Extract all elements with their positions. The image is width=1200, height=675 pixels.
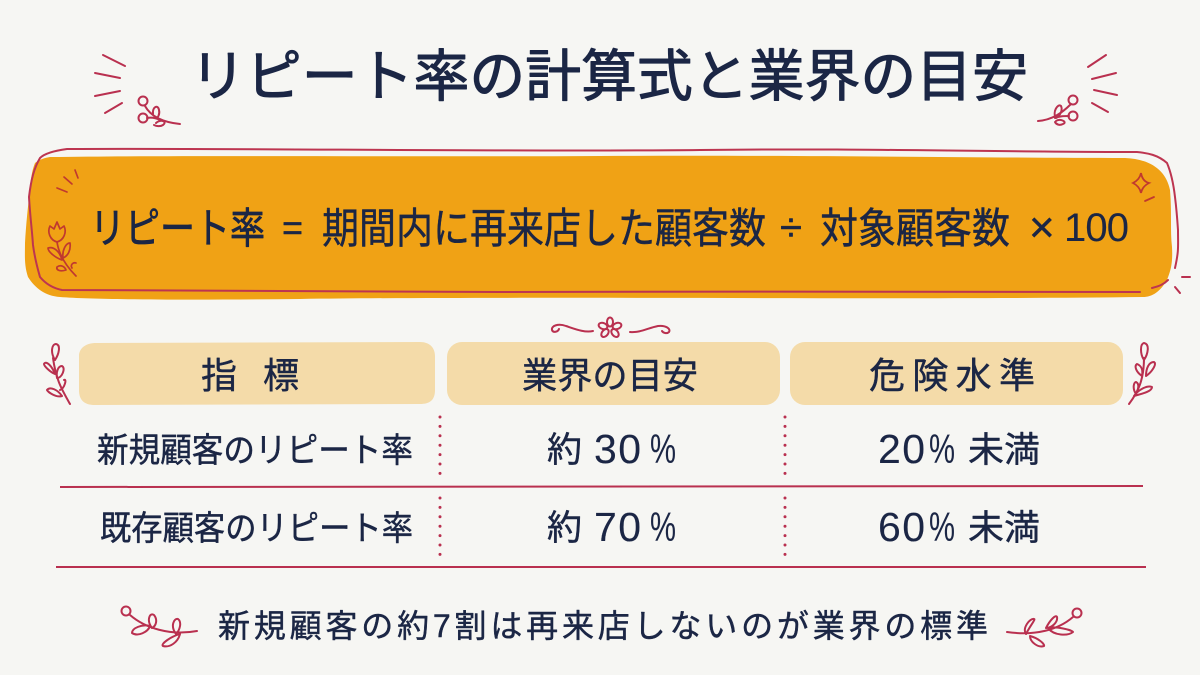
row: 既存顧客: 約 [547, 509, 582, 548]
icon: formula right sparkle [1133, 173, 1154, 201]
header cell: 危険水準 [790, 342, 1123, 405]
header cell: 業界の目安 [447, 342, 780, 405]
formula text: 対象顧客数 [820, 205, 1010, 252]
row: 既存顧客: % [650, 504, 676, 550]
icon: footer left sprig [122, 606, 197, 646]
row: 新規顧客: 未満 [968, 431, 1040, 470]
formula text: = [282, 207, 303, 248]
icon: table left sprig [44, 344, 70, 404]
header cell: 業界の目安: 業界の目安 [522, 355, 698, 396]
formula hand-drawn outline [29, 149, 1178, 292]
row: 新規顧客: % [929, 426, 955, 472]
formula text: 100 [1064, 206, 1129, 250]
row: 新規顧客: 30 [594, 426, 641, 472]
formula text: ÷ [780, 206, 802, 250]
row: 既存顧客: % [929, 504, 955, 550]
row: 新規顧客: 20 [878, 426, 925, 472]
row: 既存顧客: 未満 [968, 509, 1040, 548]
title: リピート率の計算式と業界の目安 [190, 45, 1028, 108]
row: 新規顧客: % [650, 426, 676, 472]
panel: formula [25, 149, 1190, 300]
row: 既存顧客: 70 [594, 504, 641, 550]
footer note: 新規顧客の約7割は再来店しないのが業界の標準 [218, 608, 988, 644]
row: 新規顧客: 新規顧客のリピート率 [97, 432, 413, 470]
row: 既存顧客 [100, 504, 1040, 550]
formula text [90, 203, 1129, 252]
icon: table right sprig [1129, 343, 1155, 404]
row: 既存顧客: 既存顧客のリピート率 [100, 510, 413, 548]
icon: title left sparkle lines and sprig [95, 55, 180, 126]
header cell: 指標 [79, 342, 435, 405]
panel: comparison table [56, 342, 1146, 568]
formula orange background [25, 156, 1172, 300]
row: 既存顧客: 60 [878, 504, 925, 550]
header cell: 危険水準: 危険水準 [869, 355, 1035, 396]
row: 新規顧客 [97, 426, 1040, 472]
header cell: 指標: 指標 [201, 355, 299, 396]
icon: footer right sprig [1007, 608, 1082, 646]
formula text: × [1029, 203, 1055, 252]
icon: formula corner ticks [1175, 277, 1190, 293]
formula text: リピート率 [90, 205, 265, 252]
icon: title right sparkle lines and sprig [1038, 55, 1117, 125]
formula text: 期間内に再来店した顧客数 [322, 205, 766, 252]
icon: table top ornament [552, 318, 669, 338]
row: 新規顧客: 約 [547, 431, 582, 470]
icon: formula left sprig [48, 170, 78, 276]
